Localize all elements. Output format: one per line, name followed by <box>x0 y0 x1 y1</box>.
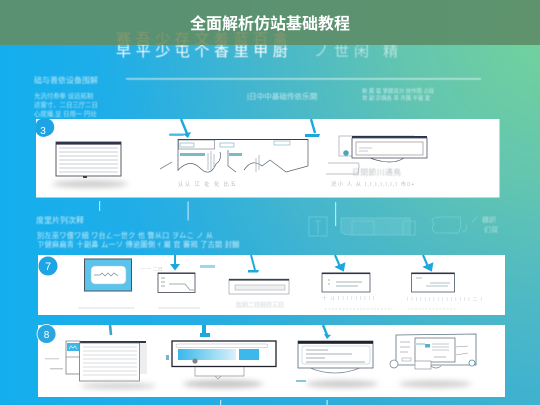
connector lines bottom <box>220 400 328 405</box>
panel: step 3 <box>36 119 500 198</box>
ghost heading overlap: 赛吾少存文羞蓝百禽 <box>116 31 292 48</box>
badge: 3: 3 <box>40 126 46 137</box>
section intro text: 新 属 毫 掌题耳分 技作围 占段 <box>362 87 435 95</box>
badge: 8 <box>37 324 56 344</box>
icon: wide window <box>229 279 289 309</box>
icon: last window: I I I I I I I I I I I I I I I 二 I <box>407 297 483 303</box>
section intro text: 允汎付叁拳 设远拓制 <box>34 91 93 100</box>
side ghost label: 们双 <box>484 225 498 234</box>
badge: 3 <box>36 119 54 137</box>
icon: site layout sketch: 认认 江 址 化 比五 <box>178 180 237 188</box>
icon: window with list <box>322 272 392 309</box>
icon: document window <box>45 341 156 389</box>
icon: browser detail: 洸小 人 从 I,I,I,I,l,l,I 市0+ <box>331 180 415 188</box>
arrow: to window <box>335 255 344 270</box>
icon: last window <box>407 272 483 309</box>
panel: step 7 <box>38 255 505 315</box>
section 7 text: ㄗ健麻扁青 十副鼻 ム一ソ 傳逾圖側 ｲ 屬 官 審揭 了古閟 封醐 <box>37 240 240 249</box>
section intro text: 适雷寸、二日三厅二日 <box>34 100 98 109</box>
arrow: short cyan <box>200 255 259 272</box>
ghost heading <box>116 43 403 60</box>
icon: wide window: 比旧二日旧日三日 <box>236 301 284 309</box>
icon: site layout sketch <box>160 139 308 188</box>
icon: wide monitor <box>166 341 276 388</box>
arrow: down to detail <box>305 119 320 137</box>
badge: 7 <box>38 256 58 276</box>
section intro text: 础与善依设备围解 <box>34 75 98 85</box>
section 7 text <box>36 215 240 249</box>
section intro text: |日中中基础传依乐開 <box>247 91 317 101</box>
title: 全面解析仿站基础教程 <box>190 14 350 33</box>
section intro text <box>34 75 481 118</box>
icon: small window: 一 一 二日 <box>140 267 163 273</box>
icon: window with list: 十 斗 I I I I I I I I I <box>322 295 375 302</box>
icon: text monitor <box>296 341 378 388</box>
side ghost label: 器訳 <box>482 215 496 224</box>
icon: browser detail <box>326 136 427 188</box>
arrow: to last window <box>423 255 432 270</box>
arrow: to text monitor <box>323 325 331 339</box>
section 7 text: 別左巫ワ僵ワ細 ワ台ㄥ一世ク 也 瞥从口 ヲ厶こ ノ 从 <box>37 231 213 240</box>
icon: blue card <box>78 259 134 308</box>
connector lines <box>99 201 336 226</box>
ghost heading: ノ世闲 精 <box>314 43 403 60</box>
arrow: to monitor <box>200 325 210 337</box>
icon: tablet diagram <box>390 334 476 388</box>
badge: 7: 7 <box>45 261 51 273</box>
side ghost label <box>482 215 498 234</box>
panel: step 8 <box>37 324 505 397</box>
icon: monitor list <box>52 142 128 187</box>
header band <box>0 0 540 45</box>
icon: browser detail: 日間節川通鳥 <box>352 167 401 177</box>
section intro text: 心度撮,呈 日用一 円壮 <box>34 109 97 118</box>
arrow: down <box>172 255 178 269</box>
arrow: down to site layout <box>169 119 191 138</box>
icon: small window <box>140 267 200 308</box>
arrow: to document <box>110 325 111 335</box>
ghost device sketch <box>309 217 477 236</box>
badge: 8: 8 <box>44 330 50 341</box>
section intro text: 常 副 宗偶各 旱 开属 平基 复 <box>362 94 431 102</box>
ghost heading: 早平少屯个香里甲厨 <box>116 43 292 60</box>
section 7 text: 度里片列次释 <box>36 215 84 225</box>
